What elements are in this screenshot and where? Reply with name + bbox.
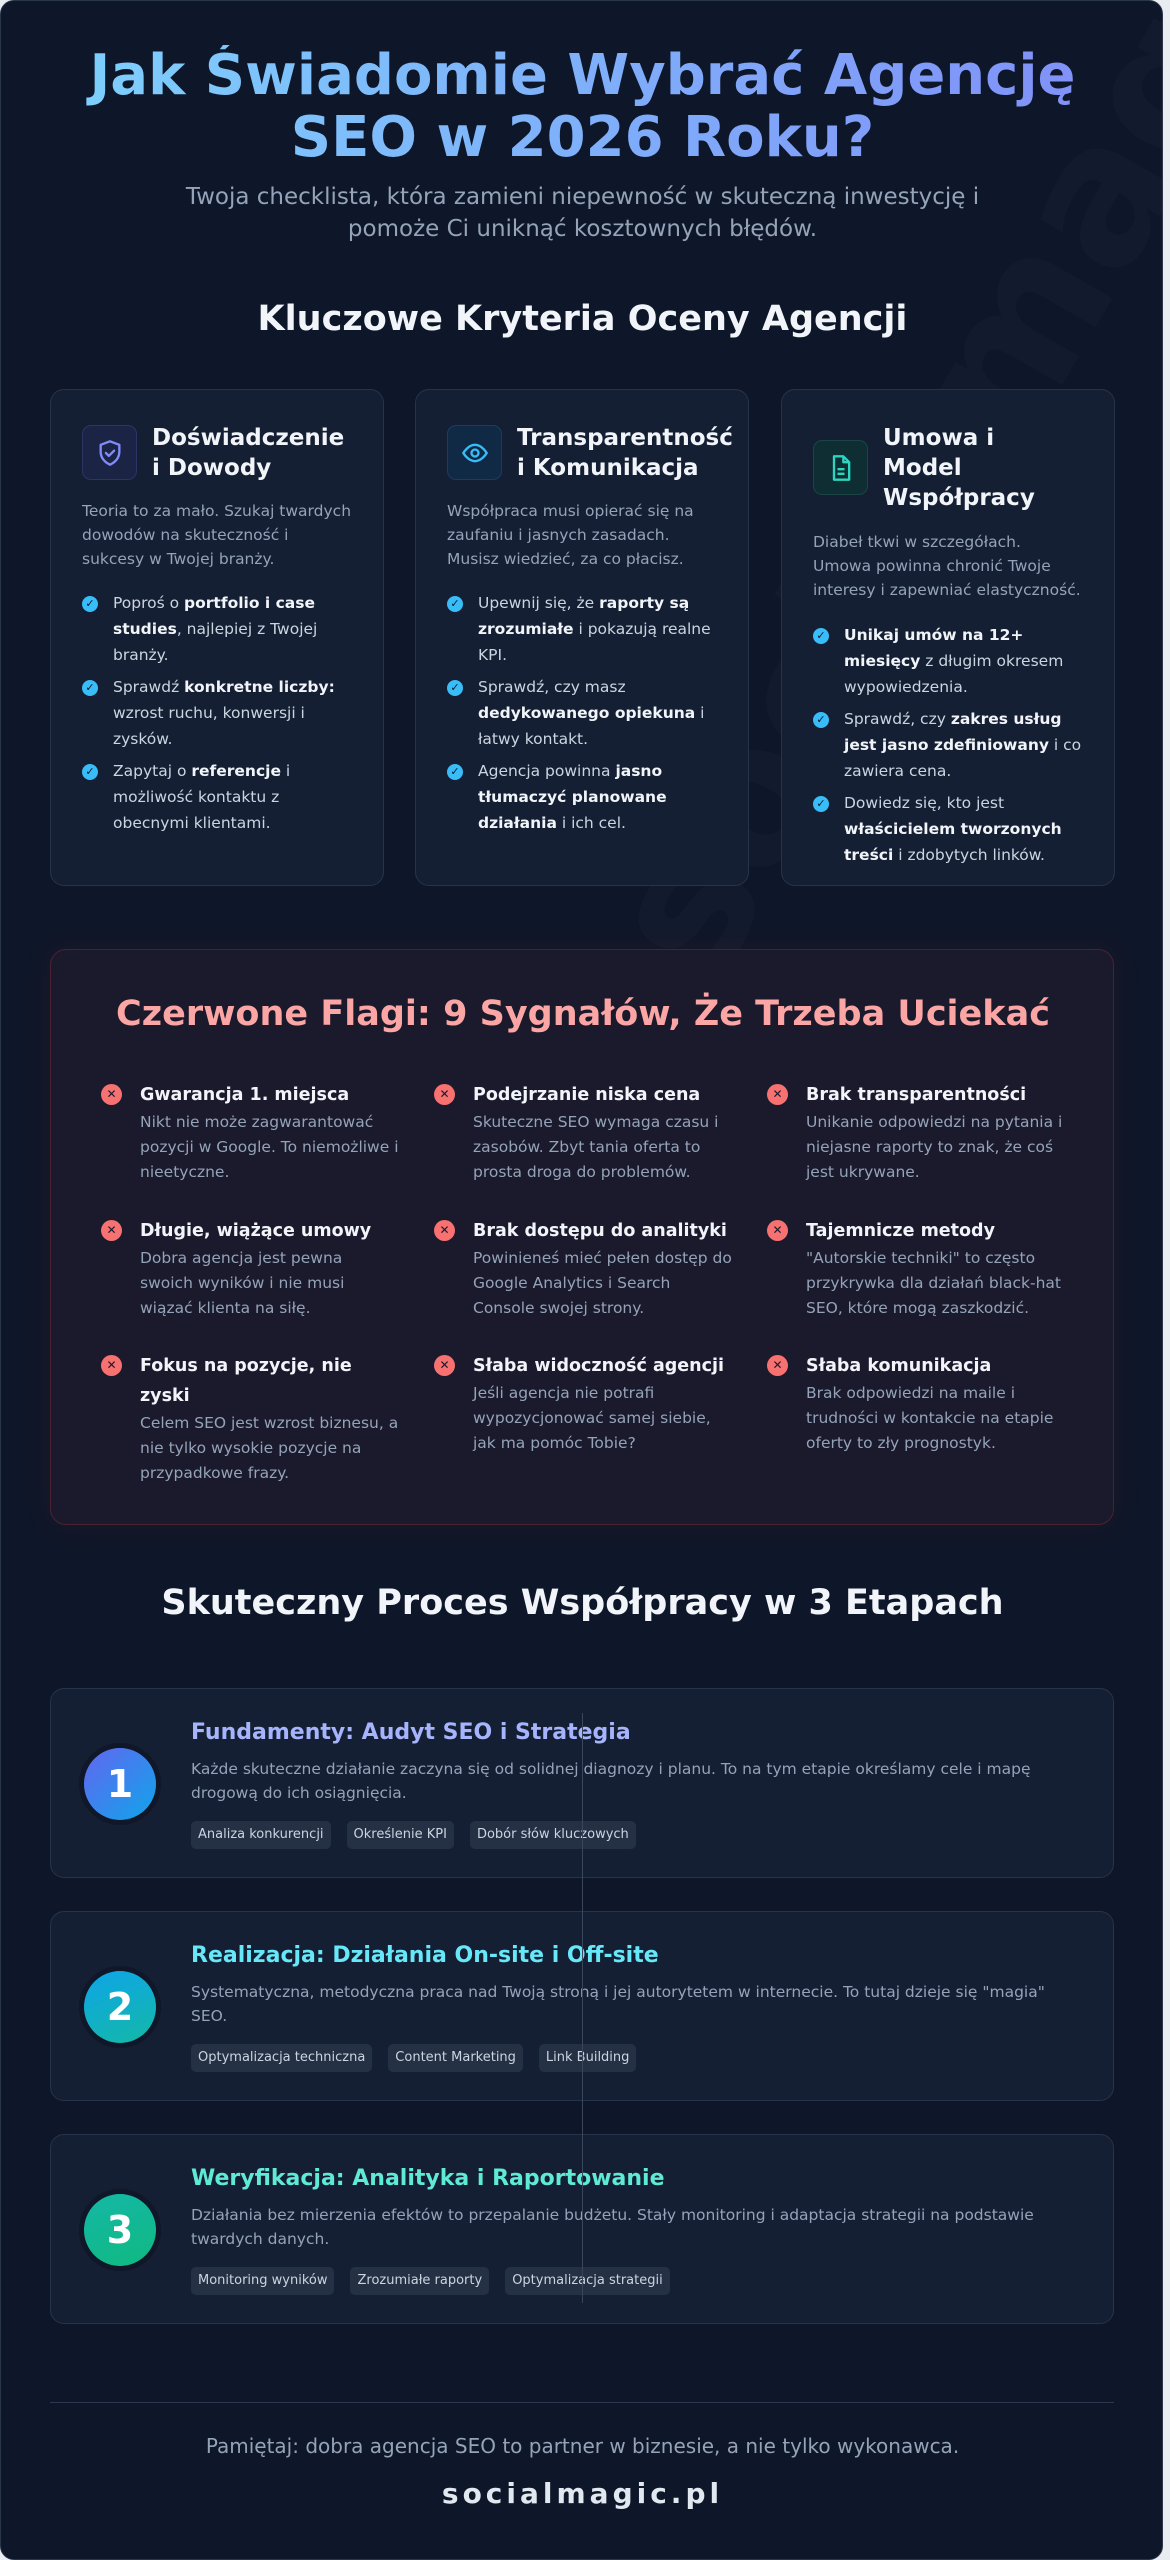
circle 3 [84,2194,156,2266]
step 2 tags: Link Building [546,2050,629,2065]
step 3 title: Weryfikacja: Analityka i Raportowanie [191,2166,664,2191]
flag 9: Słaba komunikacja [806,1356,991,1376]
flag 3: ✕ [772,1087,783,1101]
red flags heading: Czerwone Flagi: 9 Sygnałów, Że Trzeba Uciekać [116,994,1050,1034]
step 2 title: Realizacja: Działania On-site i Off-site [191,1943,659,1968]
flag 1: ✕ [106,1087,117,1101]
flag 5: ✕ [439,1223,450,1237]
card description [813,533,1081,599]
step 3 tags: Zrozumiałe raporty [357,2273,482,2288]
flag 8: Słaba widoczność agencji [473,1356,724,1376]
card description: Umowa powinna chronić Twoje [813,557,1051,575]
card heading [883,425,1035,511]
checklist [82,594,335,832]
circle 2: 2 [107,1985,133,2029]
flag 3: Unikanie odpowiedzi na pytania i niejasne raporty to znak, że coś jest ukrywane. [806,1113,1062,1181]
checklist: Unikaj umów na 12+ miesięcy z długim okresem wypowiedzenia. [844,626,1063,696]
icon: eye [447,425,502,480]
subtitle: pomoże Ci uniknąć kosztownych błędów. [348,216,817,242]
card description: Diabeł tkwi w szczegółach. [813,533,1021,551]
flag 5: Brak dostępu do analityki [473,1221,727,1241]
flag 7: Fokus na pozycje, nie zyski [140,1356,352,1406]
step 2 [50,1911,1114,2101]
step 2 tags: Content Marketing [395,2050,516,2065]
footer brand: socialmagic.pl [442,2477,723,2510]
card description [447,502,694,568]
checklist: Upewnij się, że raporty są zrozumiałe i pokazują realne KPI. [478,594,711,664]
flag 9: ✕ [772,1358,783,1372]
flag 4: swoich wyników i nie musi wiązać klienta na siłę. [140,1274,344,1317]
checklist: Dowiedz się, kto jest właścicielem tworzonych treści i zdobytych linków. [844,794,1062,864]
flag 2: Podejrzanie niska cena [473,1085,700,1105]
flag 4: ✕ [106,1223,117,1237]
checklist: ✓ [85,597,95,610]
checklist: ✓ [450,597,460,610]
card description: Musisz wiedzieć, za co płacisz. [447,550,684,568]
subtitle: Twoja checklista, która zamieni niepewność w skuteczną inwestycję i [186,184,979,210]
panel: experience [50,389,384,886]
card heading: i Dowody [152,455,271,481]
checklist: ✓ [85,681,95,694]
step 2 tags [191,2044,636,2072]
card description: dowodów na skuteczność i [82,526,288,544]
flag 6: ✕ [772,1223,783,1237]
checklist: obecnymi klientami. [113,814,271,832]
card description: interesy i zapewniać elastyczność. [813,581,1081,599]
circle 2 [84,1971,156,2043]
checklist: Sprawdź, czy masz dedykowanego opiekuna i łatwy kontakt. [478,678,704,748]
title [1,45,1164,169]
card heading [517,425,733,481]
step 1 title: Fundamenty: Audyt SEO i Strategia [191,1720,631,1745]
step 2 description: Systematyczna, metodyczna praca nad Twoją stroną i jej autorytetem w internecie. To tutaj dzieje się "magia" SEO. [191,1983,1045,2025]
flag 8: Jeśli agencja nie potrafi wypozycjonować samej siebie, jak ma pomóc Tobie? [473,1384,711,1452]
flag 3 [767,1084,1062,1181]
checklist: Poproś o portfolio i case studies, najlepiej z Twojej branży. [113,594,317,664]
checklist: ✓ [816,629,826,642]
card heading: Model [883,455,962,481]
card description: zaufaniu i jasnych zasadach. [447,526,670,544]
step 3 description: Działania bez mierzenia efektów to przepalanie budżetu. Stały monitoring i adaptacja strategii na podstawie twardych danych. [191,2206,1034,2248]
flag 2: ✕ [439,1087,450,1101]
checklist [447,594,711,832]
flag 4: Dobra agencja jest pewna [140,1249,342,1267]
flag 5: Powinieneś mieć pełen dostęp do Google Analytics i Search Console swojej strony. [473,1249,732,1317]
flag 6: "Autorskie techniki" to często przykrywka dla działań black-hat SEO, które mogą zaszkodzić. [806,1249,1061,1317]
flag 2: Skuteczne SEO wymaga czasu i zasobów. Zbyt tania oferta to prosta droga do problemów. [473,1113,718,1181]
circle 1 [84,1748,156,1820]
circle 3: 3 [107,2208,133,2252]
card heading [152,425,344,481]
flag 9: Brak odpowiedzi na maile i trudności w kontakcie na etapie oferty to zły prognostyk. [806,1384,1053,1452]
flag 4: Długie, wiążące umowy [140,1221,371,1241]
card description: sukcesy w Twojej branży. [82,550,274,568]
title: Jak Świadomie Wybrać Agencję [89,43,1076,108]
step 3 tags: Monitoring wyników [198,2273,327,2288]
card description: Współpraca musi opierać się na [447,502,694,520]
flag 7 [101,1355,398,1482]
checklist: Sprawdź, czy zakres usług jest jasno zdefiniowany i co zawiera cena. [844,710,1081,780]
checklist: Sprawdź konkretne liczby: wzrost ruchu, konwersji i zysków. [113,678,335,748]
card heading: i Komunikacja [517,455,699,481]
flag 6: Tajemnicze metody [806,1221,995,1241]
icon: document [813,440,868,495]
flag 2 [434,1084,718,1181]
checklist: ✓ [816,713,826,726]
flag 7: Celem SEO jest wzrost biznesu, a nie tylko wysokie pozycje na przypadkowe frazy. [140,1414,398,1482]
flag 1: Nikt nie może zagwarantować pozycji w Google. To niemożliwe i nieetyczne. [140,1113,398,1181]
checklist: ✓ [816,797,826,810]
flag 4 [101,1220,371,1317]
checklist: Zapytaj o referencje i możliwość kontaktu z [113,762,290,806]
subtitle [186,184,979,242]
panel: red flags [50,949,1114,1525]
flag 8: ✕ [439,1358,450,1372]
panel: contract [781,389,1115,886]
circle 1: 1 [107,1762,133,1806]
card heading: Współpracy [883,485,1035,511]
checklist: ✓ [85,765,95,778]
checklist: Agencja powinna jasno tłumaczyć planowane działania i ich cel. [478,762,667,832]
flag 7: ✕ [106,1358,117,1372]
card heading: Transparentność [517,425,733,451]
checklist: ✓ [450,765,460,778]
step 1 tags [191,1821,636,1849]
flag 3: Brak transparentności [806,1085,1026,1105]
heading: process: Skuteczny Proces Współpracy w 3 Etapach [161,1583,1004,1623]
card heading: Umowa i [883,425,994,451]
panel: transparency [415,389,749,886]
heading: criteria: Kluczowe Kryteria Oceny Agencji [258,299,907,339]
step 3 tags [191,2267,670,2295]
step 3 tags: Optymalizacja strategii [512,2273,663,2288]
step 1 description: Każde skuteczne działanie zaczyna się od solidnej diagnozy i planu. To na tym etapie określamy cele i mapę drogową do ich osiągnięcia. [191,1760,1031,1802]
flag 1 [101,1084,398,1181]
card description [82,502,351,568]
step 1 tags: Dobór słów kluczowych [477,1827,629,1842]
title: SEO w 2026 Roku? [291,105,874,170]
step 1 [50,1688,1114,1878]
checklist [813,626,1081,864]
step 1 tags: Analiza konkurencji [198,1827,324,1842]
step 3 [50,2134,1114,2324]
flag 6 [767,1220,1061,1317]
card description: Teoria to za mało. Szukaj twardych [82,502,351,520]
flag 9 [767,1355,1053,1452]
footer note: Pamiętaj: dobra agencja SEO to partner w biznesie, a nie tylko wykonawca. [206,2434,959,2458]
flag 8 [434,1355,724,1452]
flag 1: Gwarancja 1. miejsca [140,1085,349,1105]
step 1 tags: Określenie KPI [354,1827,447,1842]
checklist: ✓ [450,681,460,694]
step 2 tags: Optymalizacja techniczna [198,2050,365,2065]
icon: shield [82,425,137,480]
flag 5 [434,1220,732,1317]
card heading: Doświadczenie [152,425,344,451]
